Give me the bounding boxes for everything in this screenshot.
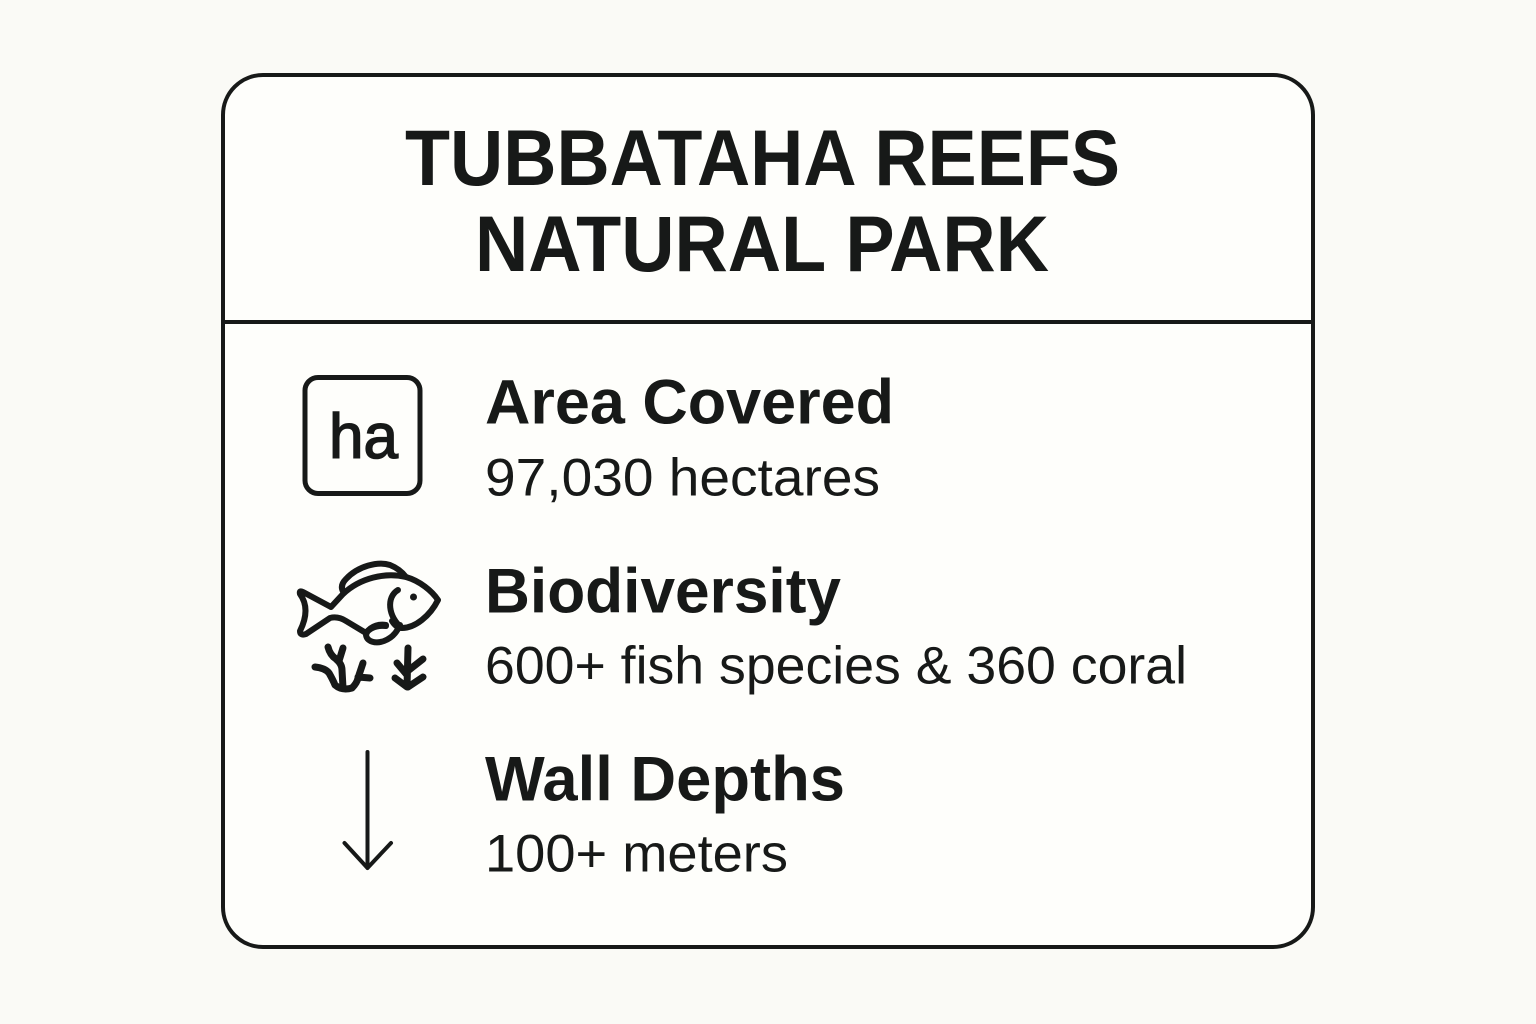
text: area value: 97,030 hectares xyxy=(485,448,880,508)
text: depth value: 100+ meters xyxy=(485,824,788,884)
text: biodiversity value: 600+ fish species & 360 coral xyxy=(485,636,1187,696)
row: wall depths xyxy=(344,744,845,884)
icon: hectares box xyxy=(305,378,420,494)
title: NATURAL PARK xyxy=(475,199,1049,288)
pectoral fin xyxy=(366,625,400,642)
heading: biodiversity: Biodiversity xyxy=(485,556,841,626)
row: area covered xyxy=(305,368,894,508)
fish body xyxy=(300,575,438,635)
icon: hectares box: ha xyxy=(329,402,399,472)
title: TUBBATAHA REEFS xyxy=(405,113,1120,202)
panel: card xyxy=(223,75,1313,947)
coral right xyxy=(395,648,423,687)
heading: area covered: Area Covered xyxy=(485,368,894,438)
dorsal fin xyxy=(342,564,406,593)
eye xyxy=(410,594,417,600)
heading: wall depths: Wall Depths xyxy=(485,744,845,814)
title xyxy=(405,113,1120,288)
coral left xyxy=(315,647,370,689)
gill xyxy=(390,590,402,628)
row: biodiversity xyxy=(300,556,1187,696)
icon: down arrow xyxy=(344,752,391,868)
icon: fish and coral xyxy=(300,564,438,689)
